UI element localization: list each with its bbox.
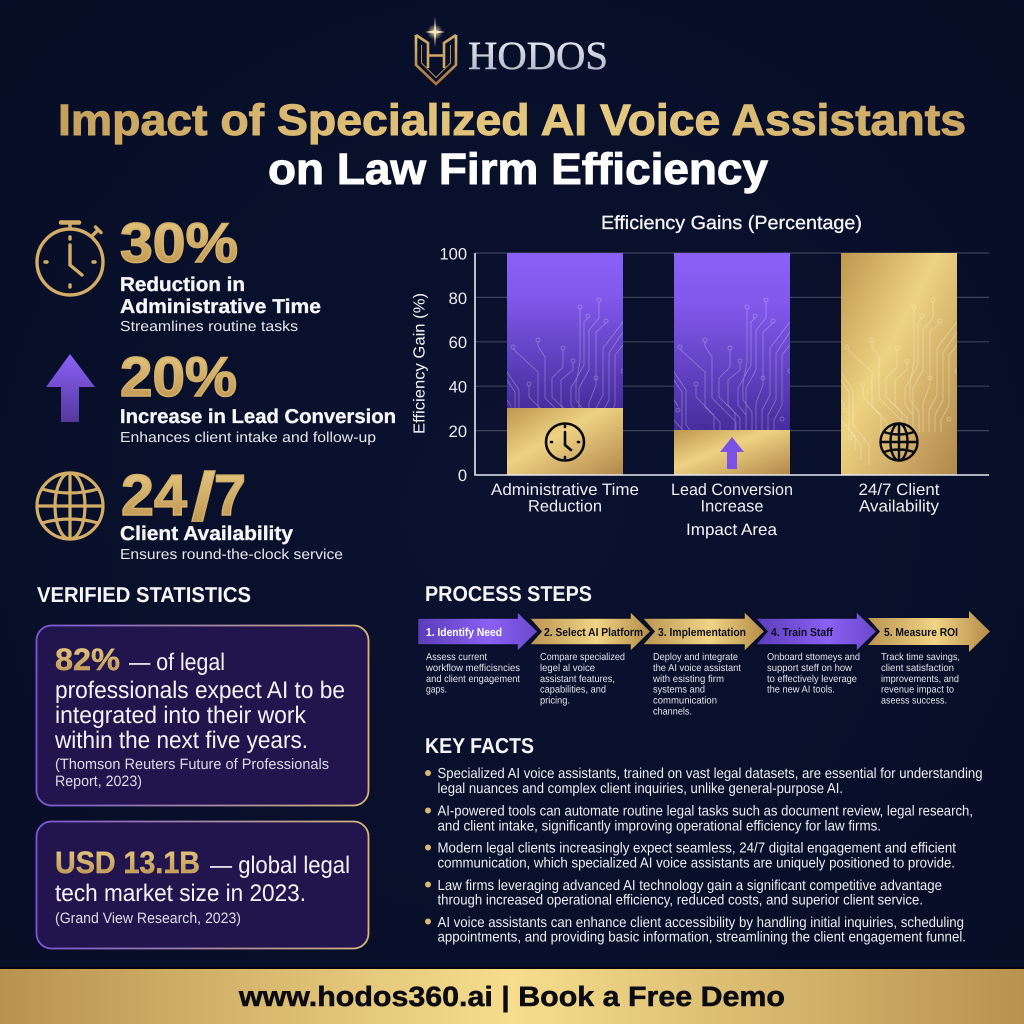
stat: 24/7 client availability: Client Availability (120, 523, 294, 545)
stat: 20% increase in lead conversion: 20% (120, 345, 237, 408)
stat: 24/7 client availability: / (191, 459, 216, 535)
stat: 24/7 client availability: 24 (121, 463, 187, 528)
step 2: select AI platform (529, 611, 651, 706)
bar chart: efficiency gains (412, 213, 989, 539)
step 1: identify need: workflow mefficisncies (425, 663, 520, 674)
step 2: select AI platform: legel al voice (540, 663, 595, 674)
card: 82% statistic: Report, 2023) (55, 773, 142, 790)
card: USD 13.1B statistic (36, 822, 368, 948)
icon: stopwatch (37, 222, 103, 295)
step 5: measure ROI: aseess success. (881, 696, 947, 706)
icon: shield with star (416, 17, 456, 84)
stat: 24/7 client availability: Ensures round-the-clock service (120, 547, 343, 563)
icon: clock (546, 424, 584, 460)
card: 82% statistic: within the next five years. (54, 727, 308, 754)
heading: key facts: KEY FACTS (425, 734, 534, 758)
step 3: implementation: 3. Implementation (658, 627, 746, 639)
y axis ticks: 0 (458, 467, 467, 485)
bar: lead conversion (674, 253, 792, 475)
step 4: train staff: 4. Train Staff (771, 627, 833, 639)
stat: 24/7 client availability: 7 (214, 463, 246, 528)
category labels: 24/7 Client (858, 481, 940, 499)
stat: 30% reduction in administrative time: Streamlines routine tasks (120, 319, 298, 335)
step 3: implementation: with esisting firm (652, 674, 724, 685)
card: 82% statistic: — of legal (129, 649, 225, 676)
step 3: implementation: Deploy and integrate (653, 652, 738, 663)
icon: arrow (720, 437, 744, 469)
stat: 24/7 client availability (37, 459, 343, 563)
step 3: implementation (642, 611, 765, 718)
step 1: identify need (418, 611, 538, 696)
step 5: measure ROI: revenue impact to (881, 684, 954, 696)
step 2: select AI platform: assistant features, (540, 674, 615, 685)
footer banner: www.hodos360.ai | Book a Free Demo (238, 981, 785, 1013)
icon: globe (880, 424, 918, 460)
step 2: select AI platform: capabilities, and (540, 684, 606, 696)
category labels: Lead Conversion (671, 481, 793, 499)
icon: globe (37, 473, 103, 539)
key facts list: through increased operational efficiency, reduced costs, and superior client service. (438, 892, 923, 908)
step 5: measure ROI: client satisfaction (881, 663, 954, 674)
title: on Law Firm Efficiency (268, 145, 769, 194)
stat: 30% reduction in administrative time: Administrative Time (120, 296, 321, 318)
step 4: train staff (755, 611, 877, 696)
step 1: identify need: 1. Identify Need (426, 627, 502, 639)
step 4: train staff: the new AI tools. (767, 684, 835, 696)
category labels: Reduction (528, 498, 602, 516)
step 5: measure ROI (868, 611, 990, 706)
card: USD 13.1B statistic: (Grand View Research, 2023) (55, 910, 241, 927)
step 1: identify need: Assess current (426, 652, 487, 663)
bar: client availability (841, 253, 959, 475)
step 3: implementation: channels. (653, 706, 692, 718)
stat: 20% increase in lead conversion: Increase in Lead Conversion (120, 406, 396, 428)
step 2: select AI platform: pricing. (540, 696, 570, 706)
footer banner (0, 967, 1024, 1024)
step 3: implementation: systems and (653, 684, 705, 696)
category labels: Availability (859, 498, 940, 516)
stat: 20% increase in lead conversion (46, 345, 396, 446)
category labels (491, 481, 940, 516)
card: 82% statistic: professionals expect AI to be (55, 677, 345, 704)
key facts list: Modern legal clients increasingly expect seamless, 24/7 digital engagement and efficient (438, 840, 956, 856)
key facts list: legal nuances and complex client inquiries, unlike general-purpose AI. (438, 781, 843, 797)
key facts list: AI voice assistants can enhance client accessibility by handling initial inquiries, scheduling (438, 915, 964, 931)
stat: 30% reduction in administrative time (37, 211, 321, 335)
y axis ticks: 100 (439, 246, 467, 264)
step 1: identify need: and client engagement (426, 674, 520, 685)
step 3: implementation: communication (653, 696, 717, 706)
y axis ticks (439, 246, 467, 485)
key facts list: and client intake, significantly improving operational efficiency for law firms. (438, 818, 881, 834)
step 3: implementation: the AI voice assistant (653, 663, 741, 674)
heading: verified statistics: VERIFIED STATISTICS (37, 583, 251, 607)
step 4: train staff: Onboard sttomeys and (767, 652, 860, 663)
step 5: measure ROI: 5. Measure ROI (884, 627, 958, 639)
key facts list: Specialized AI voice assistants, trained on vast legal datasets, are essential for understanding (438, 766, 982, 782)
x axis label: Impact Area (686, 521, 778, 539)
step 4: train staff: support steff on how (767, 663, 853, 674)
card: 82% statistic (36, 626, 368, 806)
card: USD 13.1B statistic: tech market size in 2023. (55, 880, 306, 907)
step 1: identify need: gaps. (426, 684, 447, 696)
step 5: measure ROI: improvements, and (881, 674, 959, 685)
y axis ticks: 60 (449, 334, 467, 352)
wordmark: HODOS (468, 33, 608, 78)
key facts list: Law firms leveraging advanced AI technology gain a significant competitive advantage (438, 878, 942, 894)
y axis ticks: 20 (449, 423, 467, 441)
key facts list: communication, which specialized AI voice assistants are uniquely positioned to provide. (438, 856, 955, 872)
heading: process steps: PROCESS STEPS (425, 582, 592, 606)
process steps (418, 611, 990, 718)
icon: up arrow (46, 354, 95, 422)
stat: 30% reduction in administrative time: 30% (120, 211, 238, 274)
card: 82% statistic: integrated into their work (55, 702, 307, 729)
step 4: train staff: to effectively leverage (767, 674, 857, 685)
title (58, 96, 966, 194)
card: 82% statistic: 82% (55, 642, 120, 677)
category labels: Increase (700, 498, 764, 516)
key facts list (425, 766, 982, 946)
card: USD 13.1B statistic: — global legal (210, 852, 350, 879)
step 2: select AI platform: 2. Select AI Platform (544, 627, 643, 639)
key facts list: appointments, and providing basic information, streamlining the client engagement funnel. (438, 930, 966, 946)
card: USD 13.1B statistic: USD 13.1B (55, 845, 200, 880)
y axis ticks: 40 (449, 378, 467, 396)
y axis ticks: 80 (449, 290, 467, 308)
chart title: Efficiency Gains (Percentage) (601, 213, 862, 234)
bar: administrative time (507, 253, 625, 475)
title: Impact of Specialized AI Voice Assistants (58, 96, 966, 145)
y axis label: Efficiency Gain (%) (412, 293, 428, 434)
card: 82% statistic: (Thomson Reuters Future of Professionals (55, 756, 329, 773)
step 2: select AI platform: Compare specialized (540, 652, 625, 663)
stat: 30% reduction in administrative time: Reduction in (120, 274, 245, 296)
stat: 20% increase in lead conversion: Enhances client intake and follow-up (120, 430, 376, 446)
category labels: Administrative Time (491, 481, 639, 499)
key facts list: AI-powered tools can automate routine legal tasks such as document review, legal research, (438, 804, 973, 820)
step 5: measure ROI: Track time savings, (881, 652, 960, 663)
logo: Hodos (416, 17, 608, 84)
